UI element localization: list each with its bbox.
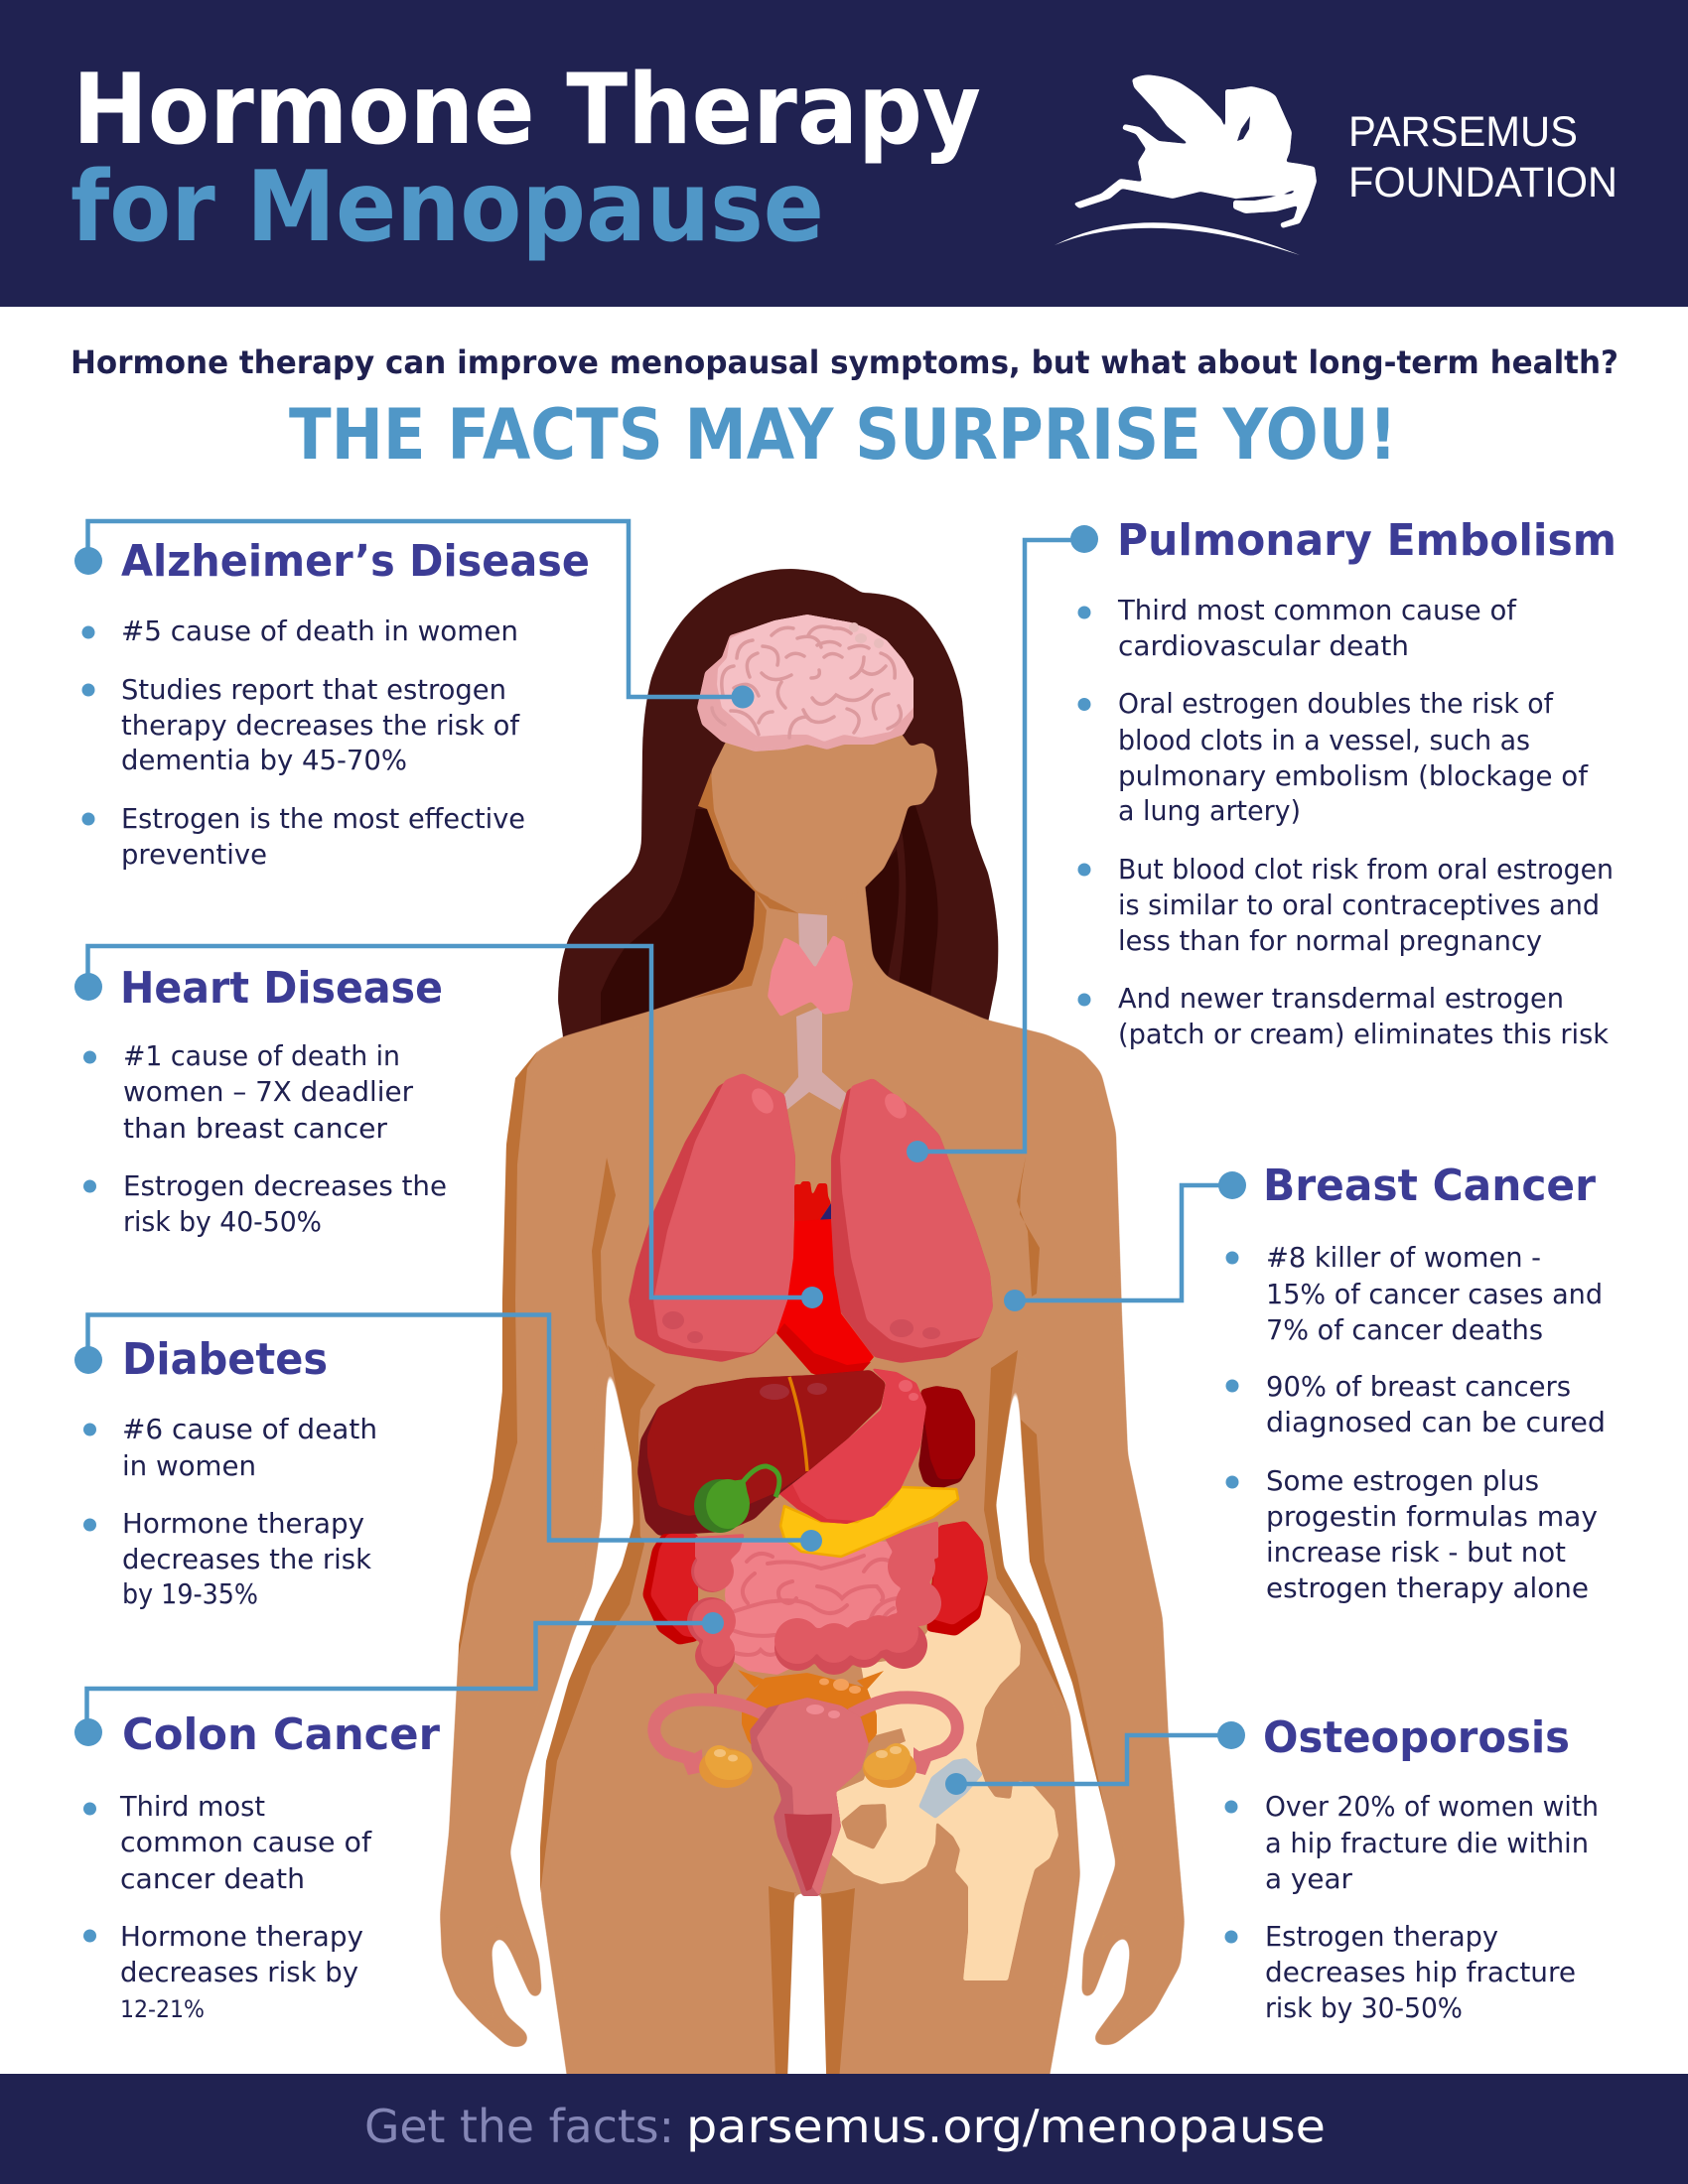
heart [776, 1181, 874, 1382]
panel: Pulmonary Embolism: cardiovascular death [1118, 630, 1409, 662]
panel: Heart Disease: Estrogen decreases the [123, 1170, 447, 1202]
connector lines [87, 521, 1232, 1784]
title: for Menopause [70, 151, 824, 264]
panel: Pulmonary Embolism: (patch or cream) eliminates this risk [1118, 1019, 1609, 1050]
panel: Pulmonary Embolism: a lung artery) [1118, 795, 1301, 827]
title [70, 54, 981, 264]
panel: Breast Cancer [1218, 1160, 1606, 1604]
panel: Breast Cancer: Some estrogen plus [1266, 1465, 1539, 1497]
trachea [780, 913, 847, 1112]
panel: Colon Cancer: cancer death [120, 1863, 305, 1895]
header banner [0, 0, 1688, 307]
panel: Heart Disease: Heart Disease [120, 963, 443, 1014]
panel: Colon Cancer: Colon Cancer [122, 1709, 440, 1760]
panel: Breast Cancer: #8 killer of women - [1266, 1242, 1541, 1274]
panel: Heart Disease: #1 cause of death in [123, 1040, 400, 1072]
panel: Alzheimer's Disease: Estrogen is the most effective [121, 803, 525, 835]
panel: Diabetes: decreases the risk [122, 1544, 371, 1575]
kidneys [642, 1521, 988, 1645]
headline: THE FACTS MAY SURPRISE YOU! [289, 394, 1397, 476]
lungs [629, 1073, 993, 1363]
subtitle question: Hormone therapy can improve menopausal symptoms, but what about long-term health? [70, 343, 1618, 381]
panel: Colon Cancer: Third most [119, 1791, 265, 1823]
panel: Alzheimer's Disease: Alzheimer’s Disease [121, 536, 590, 587]
pancreas [780, 1487, 958, 1557]
panel: Pulmonary Embolism: Third most common cause of [1117, 595, 1517, 626]
panel: Pulmonary Embolism: Oral estrogen doubles the risk of [1118, 688, 1554, 720]
panel: Breast Cancer: increase risk - but not [1266, 1537, 1566, 1569]
panel: Pulmonary Embolism [1070, 515, 1617, 1050]
panel: Breast Cancer: Breast Cancer [1263, 1160, 1596, 1211]
panel: Diabetes: in women [122, 1450, 256, 1482]
panel: Diabetes: Hormone therapy [122, 1508, 364, 1540]
panel: Diabetes [74, 1334, 377, 1610]
panel: Osteoporosis: risk by 30-50% [1265, 1992, 1463, 2024]
footer bar [0, 2074, 1688, 2184]
panel: Diabetes: #6 cause of death [122, 1414, 377, 1445]
logo: Parsemus Foundation: PARSEMUS [1348, 108, 1578, 156]
panel: Colon Cancer [74, 1709, 440, 2023]
bladder [738, 1670, 884, 1762]
panel: Osteoporosis: Estrogen therapy [1265, 1921, 1498, 1953]
liver [637, 1370, 886, 1536]
bones: pelvis and femur [831, 1595, 1058, 1980]
brain [697, 614, 914, 751]
panel: Osteoporosis: Over 20% of women with [1265, 1791, 1599, 1823]
illustration: female body with organs [440, 569, 1185, 2105]
panel: Pulmonary Embolism: And newer transdermal estrogen [1118, 983, 1564, 1015]
panel: Colon Cancer: Hormone therapy [120, 1921, 363, 1953]
panel: Heart Disease: risk by 40-50% [123, 1206, 322, 1238]
panel: Osteoporosis [1217, 1712, 1599, 2024]
stomach [779, 1368, 926, 1524]
body silhouette [440, 874, 1185, 2105]
title: Hormone Therapy [72, 54, 981, 167]
panel: Breast Cancer: 7% of cancer deaths [1266, 1314, 1543, 1346]
panel: Alzheimer's Disease: therapy decreases the risk of [121, 710, 520, 742]
panel: Pulmonary Embolism: But blood clot risk from oral estrogen [1118, 854, 1614, 886]
panel: Diabetes: Diabetes [122, 1334, 328, 1385]
panel: Colon Cancer: decreases risk by [120, 1957, 358, 1988]
panel: Heart Disease: than breast cancer [123, 1113, 388, 1145]
small intestine [725, 1539, 904, 1675]
panel: Breast Cancer: progestin formulas may [1266, 1501, 1598, 1533]
footer bar: parsemus.org/menopause [686, 2100, 1326, 2153]
thyroid [768, 935, 853, 1017]
panel: Diabetes: by 19-35% [122, 1578, 258, 1610]
large intestine [687, 1521, 941, 1699]
panel: Colon Cancer: common cause of [120, 1827, 372, 1858]
panel: Breast Cancer: 15% of cancer cases and [1266, 1279, 1603, 1310]
panel: Alzheimer's Disease: dementia by 45-70% [121, 745, 407, 776]
panel: Colon Cancer: 12-21% [120, 1995, 205, 2023]
gallbladder [694, 1466, 779, 1533]
uterus, tubes and ovaries [654, 1698, 957, 1896]
panel: Pulmonary Embolism: Pulmonary Embolism [1117, 515, 1617, 566]
hip socket [918, 1758, 983, 1819]
spleen [918, 1386, 975, 1490]
logo: Parsemus Foundation: FOUNDATION [1348, 159, 1618, 206]
panel: Heart Disease [74, 963, 447, 1238]
face and ear [711, 730, 937, 912]
icon: winged horse [1055, 75, 1317, 255]
panel: Osteoporosis: a year [1265, 1863, 1353, 1895]
panel: Osteoporosis: decreases hip fracture [1265, 1957, 1576, 1988]
hair [558, 569, 998, 1052]
footer bar: Get the facts: [364, 2100, 674, 2153]
panel: Pulmonary Embolism: pulmonary embolism (blockage of [1118, 760, 1589, 792]
panel: Alzheimer's Disease: #5 cause of death in women [121, 615, 518, 647]
lung right [831, 1078, 993, 1363]
panel: Osteoporosis: Osteoporosis [1263, 1712, 1570, 1763]
panel: Heart Disease: women – 7X deadlier [123, 1076, 414, 1108]
body shading [459, 772, 1105, 2105]
panel: Pulmonary Embolism: blood clots in a vessel, such as [1118, 725, 1530, 756]
panel: Alzheimer's Disease: Studies report that estrogen [121, 674, 506, 706]
panel: Alzheimer's Disease: preventive [121, 839, 267, 871]
panel: Alzheimer's Disease [74, 536, 590, 871]
organ marker dots [702, 685, 1026, 1795]
panel: Osteoporosis: a hip fracture die within [1265, 1828, 1589, 1859]
panel: Breast Cancer: estrogen therapy alone [1266, 1572, 1589, 1604]
logo: Parsemus Foundation [1055, 75, 1618, 255]
panel: Pulmonary Embolism: less than for normal pregnancy [1118, 925, 1542, 957]
panel: Breast Cancer: diagnosed can be cured [1266, 1407, 1606, 1438]
panel: Pulmonary Embolism: is similar to oral contraceptives and [1118, 889, 1600, 921]
panel: Breast Cancer: 90% of breast cancers [1266, 1371, 1571, 1403]
